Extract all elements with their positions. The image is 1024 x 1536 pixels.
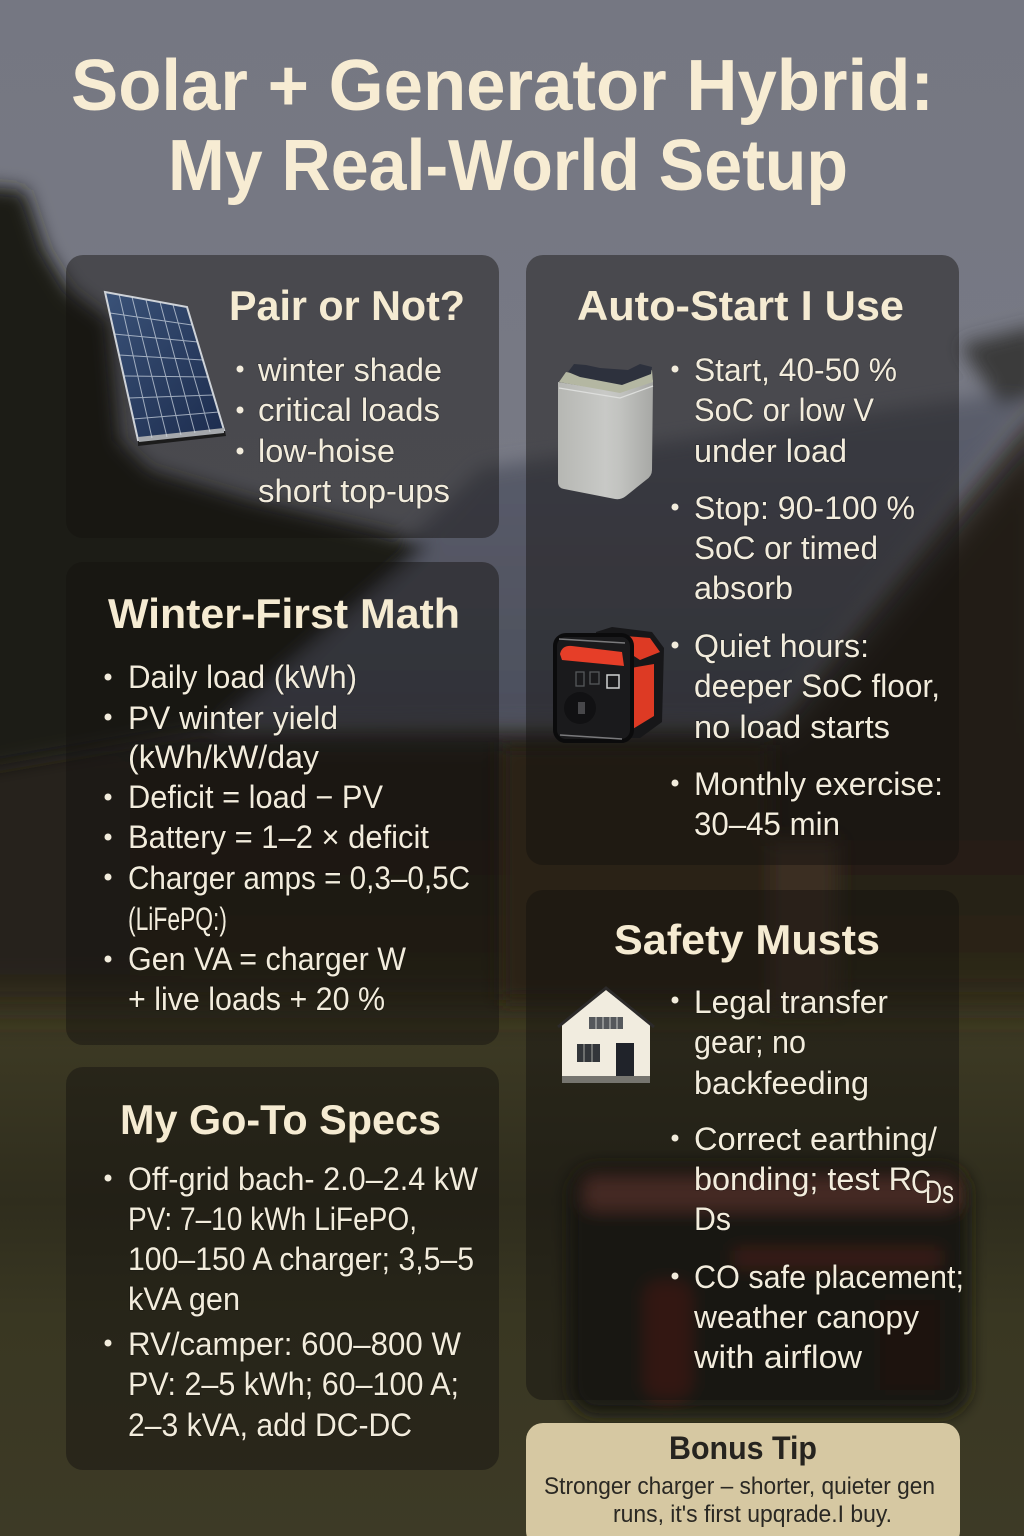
list: auto-start i use: SoC or timed — [694, 530, 878, 566]
list: my go-to specs: PV: 7–10 kWh LiFePO, — [128, 1201, 417, 1237]
list: winter-first math: Charger amps = 0,3–0,5C — [128, 860, 470, 896]
heading: pair or not: Pair or Not? — [229, 282, 465, 329]
list: my go-to specs: kVA gen — [128, 1281, 240, 1317]
list: my go-to specs: 100–150 A charger; 3,5–5 — [128, 1241, 474, 1277]
list: safety musts: gear; no — [694, 1024, 806, 1060]
text: bonus tip body: Stronger charger – shorter, quieter gen — [544, 1473, 935, 1500]
list: auto-start i use — [672, 352, 943, 842]
list: safety musts: CO safe placement; — [694, 1259, 964, 1295]
list: winter-first math: Deficit = load − PV — [128, 779, 384, 815]
heading: safety musts: Safety Musts — [614, 916, 880, 963]
list: pair or not: short top-ups — [258, 473, 450, 509]
list: safety musts: Correct earthing/ — [694, 1121, 937, 1157]
panel: safety musts — [526, 890, 964, 1400]
panel: auto-start i use — [526, 255, 959, 865]
list: my go-to specs — [104, 1161, 479, 1443]
list: winter-first math: + live loads + 20 % — [128, 981, 385, 1017]
list: winter-first math: Daily load (kWh) — [128, 659, 357, 695]
list: pair or not: low-hoise — [258, 433, 395, 469]
heading: winter-first math: Winter-First Math — [108, 590, 460, 637]
list: safety musts: Ds — [925, 1174, 954, 1210]
icon: house — [558, 988, 654, 1083]
list: my go-to specs: Off-grid bach- 2.0–2.4 kW — [128, 1161, 479, 1197]
list: safety musts — [672, 984, 964, 1375]
list: pair or not — [236, 352, 450, 509]
list: auto-start i use: Start, 40-50 % — [694, 352, 897, 388]
list: my go-to specs: PV: 2–5 kWh; 60–100 A; — [128, 1366, 459, 1402]
list: pair or not: winter shade — [257, 352, 442, 388]
list: winter-first math: Battery = 1–2 × deficit — [128, 819, 429, 855]
list: winter-first math: PV winter yield — [128, 700, 338, 736]
list: auto-start i use: SoC or low V — [694, 392, 875, 428]
text: bonus tip body — [544, 1473, 935, 1528]
title — [71, 46, 934, 206]
title: My Real-World Setup — [168, 126, 848, 206]
heading: auto-start i use: Auto-Start I Use — [577, 282, 904, 329]
list: my go-to specs: 2–3 kVA, add DC-DC — [128, 1407, 412, 1443]
list: pair or not: critical loads — [258, 392, 440, 428]
heading: my go-to specs: My Go-To Specs — [120, 1096, 441, 1143]
list: safety musts: Legal transfer — [694, 984, 888, 1020]
list: safety musts: weather canopy — [693, 1299, 919, 1335]
list: safety musts: bonding; test R — [694, 1161, 912, 1197]
list: auto-start i use: Quiet hours: — [694, 628, 869, 664]
heading: bonus tip: Bonus Tip — [669, 1430, 817, 1466]
list: auto-start i use: Monthly exercise: — [694, 766, 943, 802]
list: safety musts: with airflow — [693, 1339, 863, 1375]
text: bonus tip body: runs, it's first upqrade.I buy. — [613, 1501, 892, 1528]
list: auto-start i use: under load — [694, 433, 847, 469]
list: winter-first math: (kWh/kW/day — [128, 739, 319, 775]
icon: generator — [555, 627, 664, 741]
list: auto-start i use: Stop: 90-100 % — [694, 490, 915, 526]
list: winter-first math: Gen VA = charger W — [128, 941, 407, 977]
panel: pair or not — [66, 255, 499, 538]
list: winter-first math — [104, 659, 470, 1017]
list: auto-start i use: deeper SoC floor, — [694, 668, 940, 704]
list: auto-start i use: 30–45 min — [694, 806, 840, 842]
icon: battery — [558, 364, 653, 499]
list: safety musts: backfeeding — [694, 1065, 869, 1101]
panel: winter-first math — [66, 562, 499, 1045]
list: safety musts: Ds — [694, 1201, 731, 1237]
list: safety musts: C — [911, 1164, 931, 1200]
list: winter-first math: (LiFePQ:) — [128, 901, 227, 937]
icon: solar panel — [105, 292, 226, 446]
title: Solar + Generator Hybrid: — [71, 46, 934, 126]
list: auto-start i use: absorb — [694, 570, 793, 606]
panel: my go-to specs — [66, 1067, 499, 1470]
list: auto-start i use: no load starts — [694, 709, 890, 745]
panel: bonus tip — [526, 1423, 960, 1536]
list: my go-to specs: RV/camper: 600–800 W — [128, 1326, 462, 1362]
